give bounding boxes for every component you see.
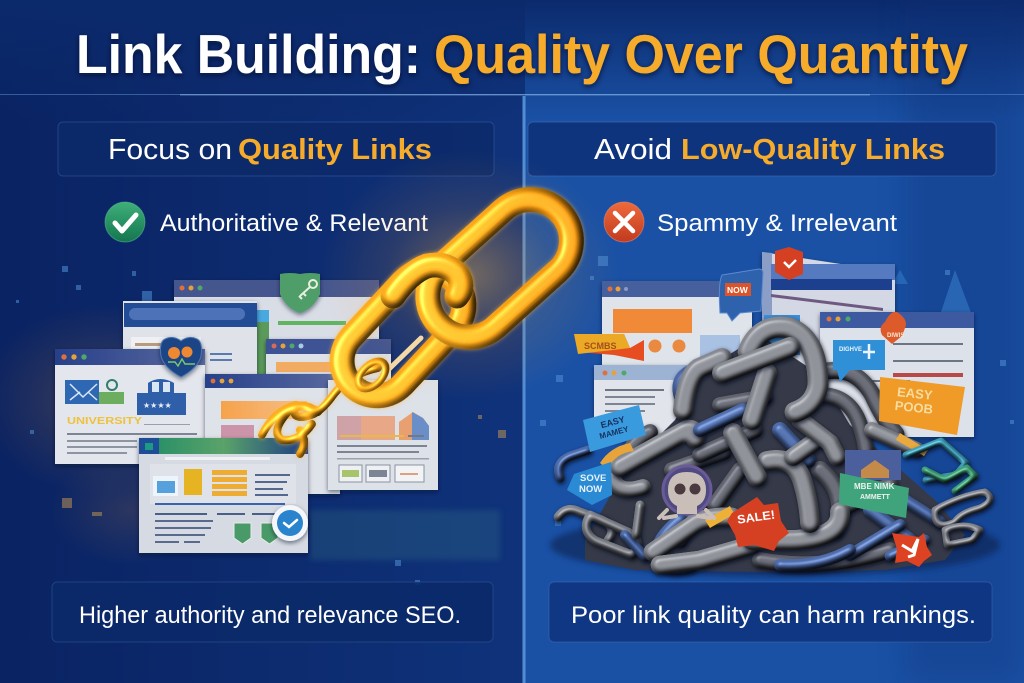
- skull badge: [659, 466, 714, 518]
- pile shadow: [550, 513, 1000, 577]
- panel: quality header: Quality Links: [238, 134, 432, 166]
- tag: easy money blue: MAMEY: [598, 424, 630, 441]
- web page: small left: [594, 365, 689, 440]
- tag: sale: [727, 497, 789, 551]
- tag: easy money blue: [583, 405, 646, 452]
- subheading: spammy: [604, 202, 897, 242]
- small link at joint: [353, 356, 391, 394]
- tag: scmbs: SCMBS: [584, 341, 617, 351]
- upper gold link: [411, 183, 588, 354]
- tag: green marketing: MBE NIMK: [854, 482, 895, 491]
- panel: quality header: Focus on: [108, 134, 232, 166]
- title: [76, 23, 968, 85]
- dark pile base: [585, 335, 965, 572]
- tag: scmbs: [574, 334, 644, 361]
- colored chain right: [906, 441, 990, 545]
- badge: heart: [160, 337, 202, 377]
- speech bubble: blue arrow: [833, 340, 885, 382]
- web page: right back: [266, 339, 391, 439]
- speech bubble: blue arrow: DIGHVE: [839, 347, 862, 353]
- tag: easy pogs orange: POOB: [894, 398, 934, 417]
- web page: analytics: [328, 380, 438, 490]
- tag: save now: NOW: [579, 484, 602, 495]
- subheading: spammy: Spammy & Irrelevant: [657, 210, 897, 237]
- front chain bars: [620, 327, 917, 565]
- title: Quality Over Quantity: [434, 23, 968, 85]
- web page: middle blue: [764, 315, 800, 355]
- web page: university: ★★★★: [143, 401, 172, 410]
- title rule: [0, 94, 1024, 96]
- lower link overlap: [393, 265, 461, 296]
- panel: higher authority caption: Higher authority and relevance SEO.: [79, 602, 461, 629]
- background chain links: [622, 370, 940, 568]
- panel: poor quality caption: Poor link quality can harm rankings.: [571, 602, 976, 629]
- badge: key: [280, 273, 320, 313]
- badge: red arrow star: [892, 533, 932, 567]
- title: Link Building:: [76, 23, 421, 85]
- side chains left: [558, 450, 645, 557]
- tag: save now: SOVE: [580, 473, 606, 484]
- web page: header site: [123, 301, 257, 421]
- icon: golden chain: [262, 150, 620, 454]
- tag: easy money blue: EASY: [599, 414, 626, 430]
- inner link thread: [385, 338, 421, 373]
- speech bubble: now: NOW: [727, 285, 749, 295]
- web page: university: UNIVERSITY: [67, 415, 142, 427]
- badge: red shield: [775, 247, 803, 280]
- lower gold link: [328, 256, 478, 410]
- web page: front card: [139, 438, 308, 553]
- badge: blue check: [272, 505, 308, 541]
- subheading: authoritative: [105, 202, 428, 242]
- gold stripe on chain: [896, 433, 928, 456]
- badge: orange drop: [881, 312, 906, 344]
- tag: save now: [567, 462, 612, 505]
- panel: avoid header: [528, 122, 996, 176]
- subheading: authoritative: Authoritative & Relevant: [160, 210, 428, 237]
- web page: orange mail: [602, 281, 752, 416]
- tag: sale: SALE!: [736, 508, 776, 527]
- web page: top right: [762, 252, 895, 395]
- panel: avoid header: Avoid: [594, 134, 672, 166]
- illustration: authoritative web pages: [55, 273, 438, 553]
- web page: university: [55, 349, 205, 464]
- web page: center: [205, 374, 340, 494]
- illustration: spam web pages: [594, 252, 974, 440]
- orange stripe on left chain: [600, 443, 634, 469]
- tag: easy pogs orange: [879, 377, 965, 435]
- panel: avoid header: Low-Quality Links: [681, 134, 945, 166]
- center divider: [522, 96, 526, 683]
- panel: quality header: [58, 122, 494, 176]
- tag: easy pogs orange: EASY: [896, 384, 934, 403]
- small chain links: [262, 368, 378, 454]
- speech bubble: now: [719, 269, 763, 321]
- panel: poor quality caption: [549, 582, 992, 642]
- tag: green marketing: [839, 450, 909, 518]
- badge: orange drop: DIWIS: [887, 333, 904, 339]
- tag: green marketing: AMMETT: [860, 494, 891, 501]
- web page: key site: [174, 280, 379, 410]
- web page: right: [820, 312, 974, 437]
- gold accent stripe: [705, 506, 734, 528]
- illustration: tangled chain pile: [550, 247, 1000, 577]
- panel: higher authority caption: [52, 582, 493, 642]
